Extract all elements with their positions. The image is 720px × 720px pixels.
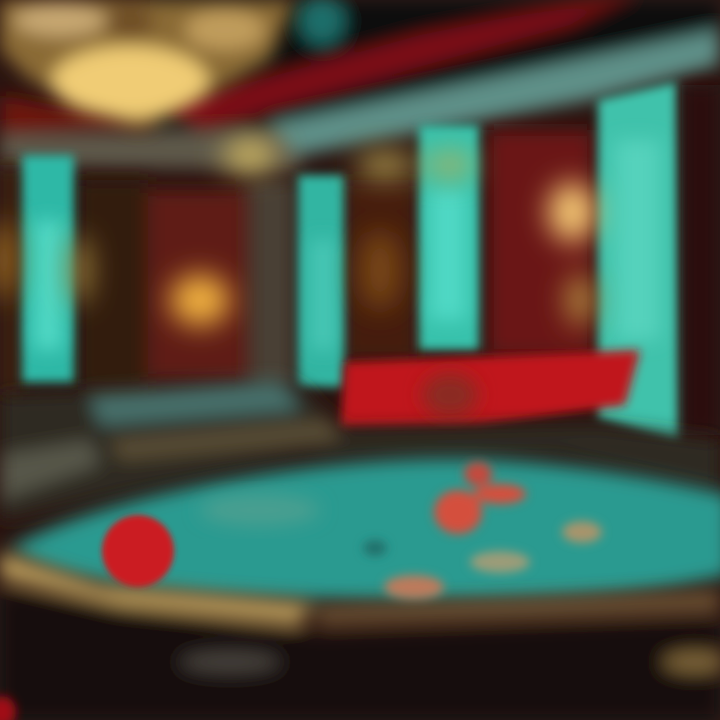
red chip [102, 515, 174, 587]
ceiling [0, 0, 720, 170]
red corner accent [0, 696, 16, 720]
chandelier [0, 0, 295, 130]
wall panels [0, 85, 720, 435]
pillar highlights [34, 140, 660, 350]
table [10, 458, 720, 602]
teal pillars [22, 82, 678, 442]
red banner [340, 350, 640, 428]
felt highlight [200, 494, 320, 526]
bottom dark area [0, 552, 720, 720]
lower wall and table edge [0, 380, 720, 520]
tan chips [363, 521, 602, 599]
wall lights [0, 137, 596, 326]
coral chips [434, 462, 526, 534]
table felt [10, 458, 720, 602]
banner texture [422, 373, 478, 417]
